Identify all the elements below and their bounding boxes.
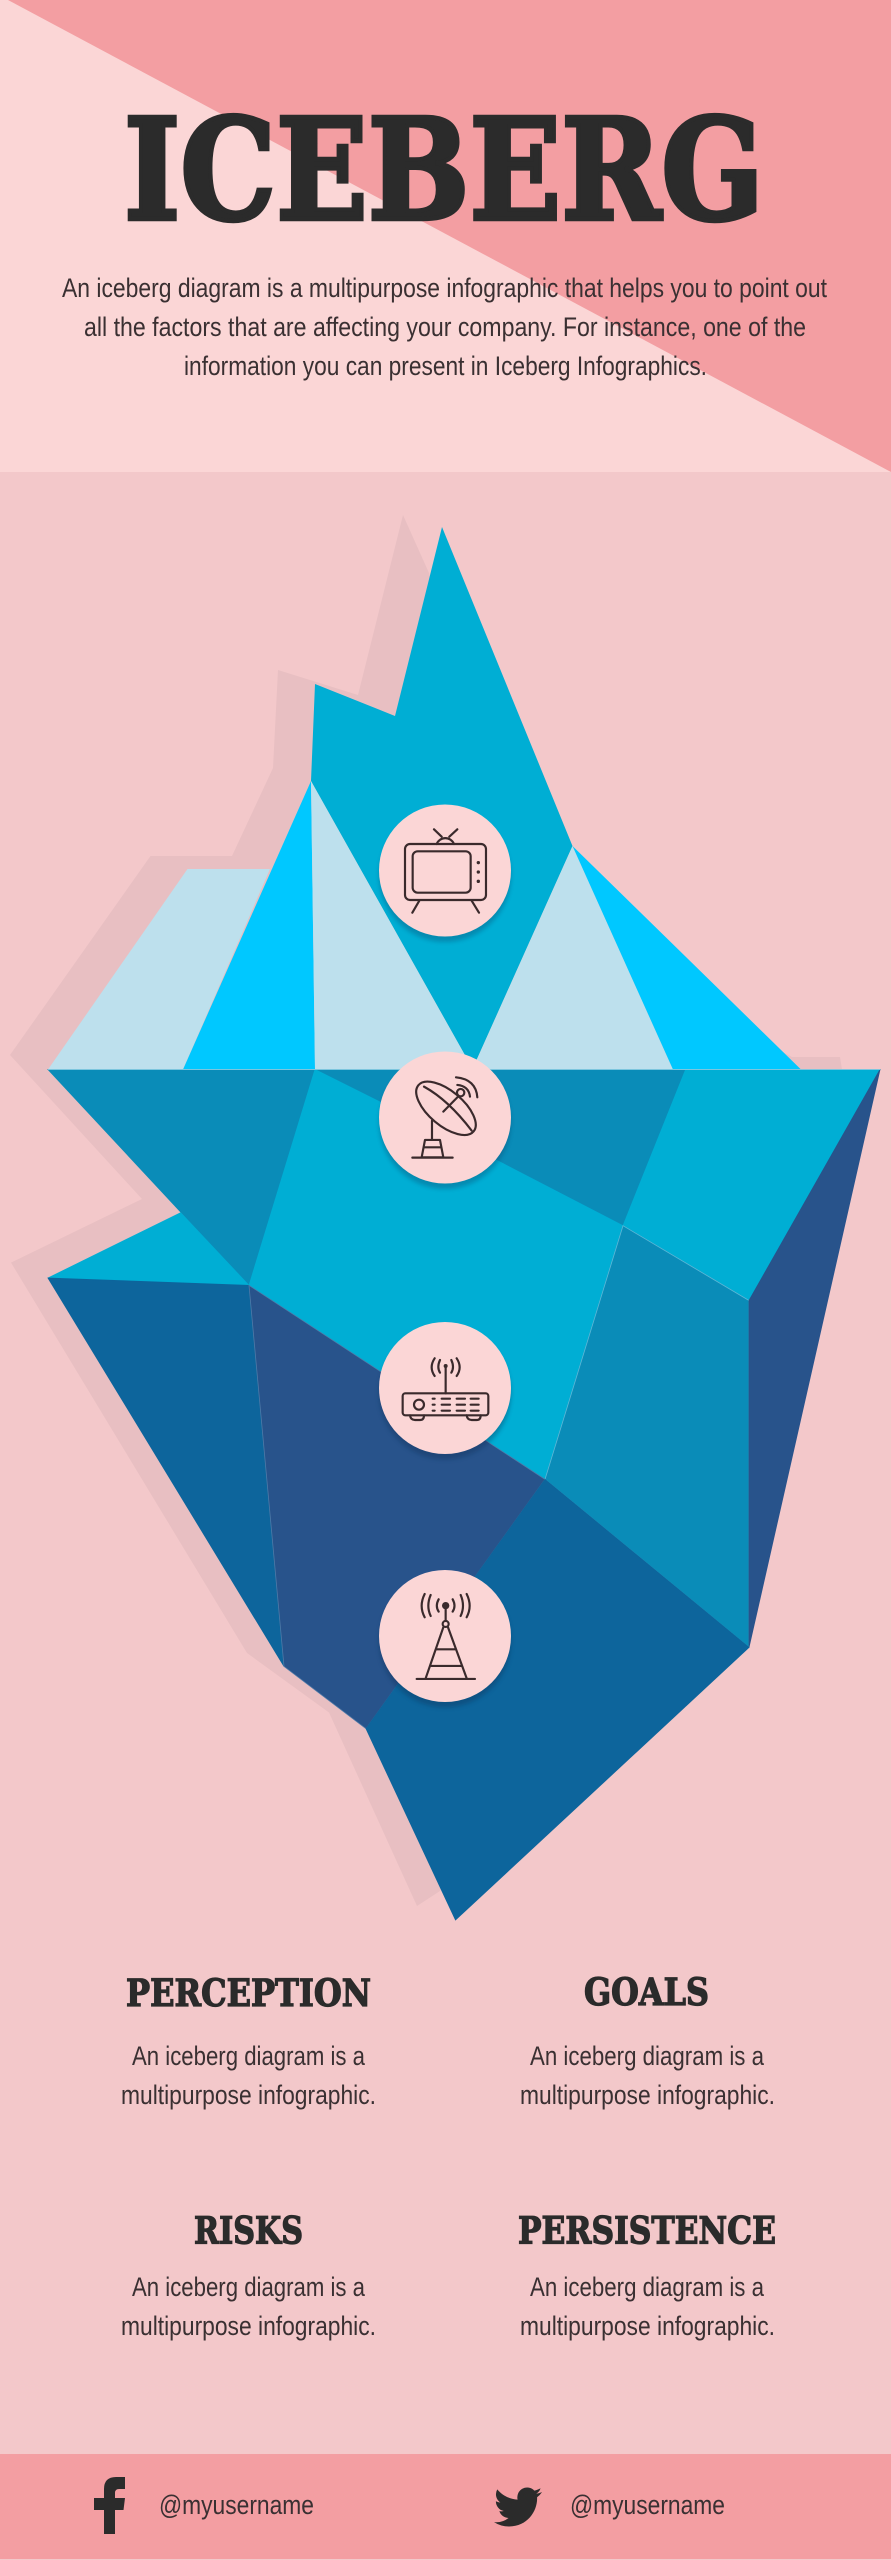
iceberg shadow: [10, 515, 842, 1906]
facebook handle: @myusername: [159, 2490, 314, 2520]
block: risks: [121, 2208, 376, 2341]
block: risks: multipurpose infographic.: [121, 2311, 376, 2341]
header diagonal triangle: [8, 0, 891, 472]
block: risks: RISKS: [194, 2208, 303, 2252]
block: persistence: multipurpose infographic.: [520, 2311, 775, 2341]
water line: [48, 1068, 880, 1070]
block: perception: An iceberg diagram is a: [132, 2041, 365, 2071]
block: perception: PERCEPTION: [126, 1971, 371, 2015]
block: perception: [121, 1971, 376, 2110]
block: perception: multipurpose infographic.: [121, 2080, 376, 2110]
icon circle: antenna tower: [379, 1570, 511, 1708]
block: persistence: An iceberg diagram is a: [530, 2272, 764, 2302]
icon circle: satellite dish: [379, 1052, 511, 1189]
below water: ice body: [48, 1070, 880, 1920]
icon circle: router: [379, 1322, 511, 1460]
header panel: [0, 0, 891, 472]
above water: ice tip: [48, 527, 801, 1070]
intro text: information you can present in Iceberg Infographics.: [184, 351, 707, 381]
block: goals: [520, 1970, 775, 2110]
icon circle: television: [379, 804, 511, 942]
block: persistence: [518, 2208, 776, 2341]
icon: facebook: [94, 2477, 125, 2534]
footer band: [0, 2454, 891, 2559]
twitter handle: @myusername: [570, 2490, 725, 2520]
iceberg diagram: [10, 515, 880, 1920]
icon: twitter: [494, 2488, 542, 2526]
block: goals: An iceberg diagram is a: [530, 2041, 764, 2071]
block: goals: multipurpose infographic.: [520, 2080, 775, 2110]
block: goals: GOALS: [584, 1970, 709, 2014]
intro text: [62, 273, 828, 381]
block: persistence: PERSISTENCE: [518, 2208, 776, 2252]
intro text: all the factors that are affecting your company. For instance, one of the: [84, 312, 806, 342]
block: risks: An iceberg diagram is a: [132, 2272, 365, 2302]
title: ICEBERG: [124, 89, 764, 253]
